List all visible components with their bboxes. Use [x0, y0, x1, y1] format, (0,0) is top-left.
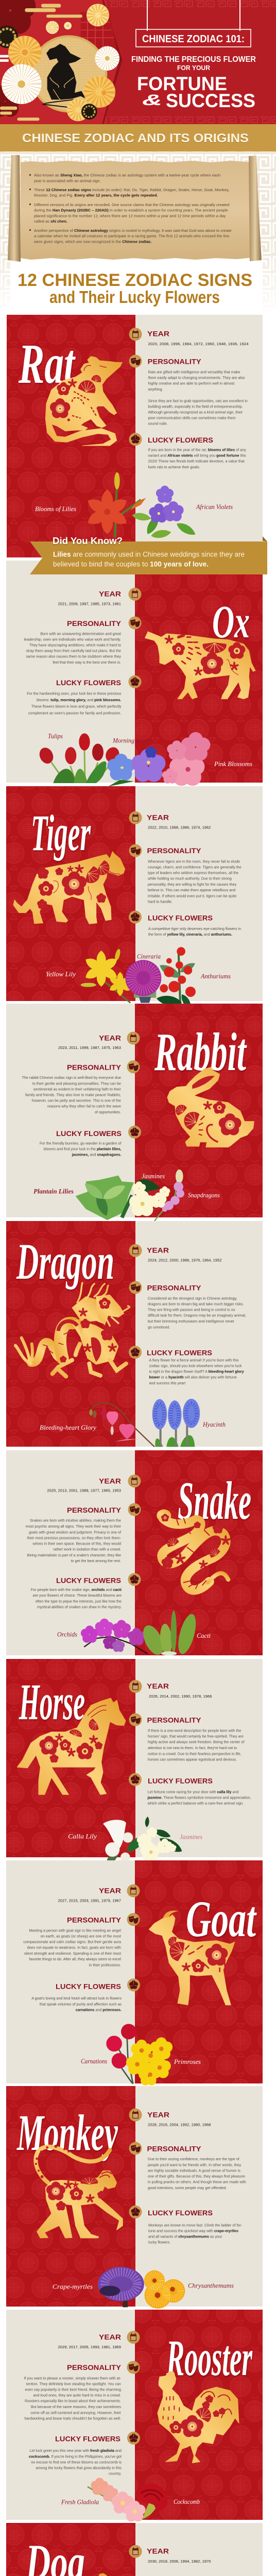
- title: [131, 33, 256, 111]
- flowers: orchids and cacti: [81, 1611, 199, 1658]
- years: 2022, 2010, 1998, 1986, 1974, 1962: [148, 825, 211, 830]
- personality text: type of leaders who seldom express themselves, all the: [148, 871, 238, 875]
- heading: lucky flowers: LUCKY FLOWERS: [147, 1348, 212, 1357]
- personality text: [148, 2157, 246, 2190]
- personality text: irritable. If others would even put it, tigers can be quite: [148, 893, 236, 898]
- name: Horse: Horse: [19, 1673, 85, 1731]
- heading: lucky flowers: LUCKY FLOWERS: [56, 679, 121, 687]
- origin text: Different versions of its origins are recorded. One source claims that the Chinese astrology was originally created: [34, 202, 229, 207]
- flowers: carnations and primroses: [106, 2024, 173, 2086]
- scroll with origin text: [8, 155, 262, 262]
- title: SUCCESS: [166, 90, 255, 111]
- icons: year, personality, flowers: [128, 1475, 141, 1586]
- panel: Rat: [7, 315, 263, 557]
- heading: year: YEAR: [147, 330, 169, 338]
- heading: personality: PERSONALITY: [67, 1916, 122, 1924]
- heading: personality: PERSONALITY: [147, 2144, 201, 2153]
- lucky flowers text: A goat's loving and kind heart will attract luck in flowers: [31, 1996, 122, 2001]
- panel: Horse: [6, 1659, 263, 1867]
- heading: personality: PERSONALITY: [67, 619, 122, 628]
- personality text: sound rude.: [148, 421, 167, 426]
- heading: lucky flowers: LUCKY FLOWERS: [148, 914, 213, 922]
- flower labels: Cacti: [197, 1632, 211, 1639]
- lucky flowers text: If you are born in the year of the rat, blooms of lilies of any: [148, 448, 246, 452]
- years: 2023, 2011, 1999, 1987, 1975, 1963: [58, 1045, 121, 1050]
- personality text: same reason also causes them to be stubborn where they: [26, 654, 121, 659]
- personality text: even say popularity is their best friend. Being the charming: [25, 2387, 121, 2392]
- flowers: fresh gladiola and cockscomb: [88, 2478, 167, 2521]
- personality text: hard to handle.: [148, 899, 173, 904]
- title: &: [142, 92, 162, 109]
- flowers: tulips, morning glory, pink blossoms: [37, 732, 210, 787]
- years: 2028, 2016, 2004, 1992, 1980, 1968: [148, 2122, 211, 2127]
- flower labels: Snapdragons: [188, 1191, 220, 1199]
- flower labels: [68, 1832, 202, 1840]
- personality text: poor communication skills can sometimes make them: [148, 416, 236, 420]
- flower labels: [33, 1172, 220, 1199]
- personality text: [148, 1296, 246, 1329]
- personality text: and loud ones, they are quite hard to miss in a crowd.: [33, 2393, 121, 2398]
- origin text: [33, 173, 232, 244]
- personality text: believe in. This can make them appear rebellious and: [148, 888, 235, 892]
- flower labels: [81, 2057, 201, 2065]
- heading: lucky flowers: LUCKY FLOWERS: [55, 2434, 120, 2443]
- origin text: Also known as Sheng Xiao, the Chinese zodiac is an astrology system with a twelve-year cycle where each: [34, 173, 220, 178]
- lucky flowers text: A fiery flower for a fierce animal! If you're born with this: [149, 1358, 239, 1362]
- flower labels: Blooms of Lilies: [35, 505, 76, 513]
- name: Rat: Rat: [18, 332, 76, 395]
- personality text: reasons why they often fail to catch the wave: [47, 1104, 121, 1109]
- flower labels: [46, 953, 231, 980]
- heading: year: YEAR: [99, 1033, 121, 1042]
- origin text: year is associated with an animal sign.: [34, 179, 101, 183]
- flowers: calla lily and jasmine: [103, 1817, 184, 1867]
- flower labels: Pink Blossoms: [214, 760, 252, 768]
- lucky flowers text: [148, 926, 241, 937]
- flower labels: Cineraria: [137, 953, 161, 960]
- lucky flowers text: For people born with the snake sign, orchids and cacti: [31, 1587, 122, 1592]
- personality text: They have skyscraping ambitions, which make it hard to: [29, 643, 121, 648]
- origin text: were given signs, which are now recognized in the Chinese zodiac.: [33, 239, 152, 244]
- personality text: hardworking and brave traits shouldn't be forgotten as well.: [24, 2416, 121, 2421]
- lucky flowers text: zodiac sign, should you look elsewhere when you're luck: [149, 1364, 242, 1368]
- personality text: [148, 1728, 244, 1761]
- main heading: [18, 270, 252, 307]
- heading: year: YEAR: [147, 1246, 169, 1255]
- name: Tiger: Tiger: [31, 804, 91, 861]
- personality text: good intentions, some people may get offended.: [148, 2185, 227, 2190]
- personality text: goals with great wisdom and judgment. Privacy is one of: [29, 1530, 121, 1534]
- panel: Dragon: [6, 1221, 263, 1447]
- title: FORTUNE: [137, 73, 227, 94]
- flower labels: [35, 503, 233, 513]
- lucky flowers text: Let fortune come racing for your door with calla lily and: [147, 1789, 239, 1794]
- lucky flowers text: and all variants of chrysanthemums as your: [148, 2234, 222, 2239]
- personality text: building wealth, especially in the field of entrepreneurship.: [148, 404, 243, 409]
- flower labels: Jasmines: [180, 1833, 202, 1840]
- personality text: come off as self-centered and annoying. However, their: [30, 2410, 122, 2415]
- personality text: difficult task for them. Dragons may be an imaginary animal,: [148, 1313, 246, 1318]
- lucky flowers text: no excuse to find one of these blooms as cockscomb is: [31, 2460, 122, 2464]
- personality text: favorite things to do. After all, they always seem to excel: [29, 1957, 121, 1961]
- animal: monkey: [35, 2145, 123, 2238]
- personality text: are highly sociable individuals. A good sense of humor is: [148, 2168, 240, 2173]
- years: 2025, 2013, 2001, 1989, 1977, 1965, 1953: [47, 1488, 121, 1493]
- lucky flowers text: Let luck greet you this new year with fresh gladiola and: [29, 2448, 122, 2453]
- personality text: Considered as the strongest sign in Chinese astrology,: [148, 1296, 237, 1300]
- personality text: their most precious possessions, so they often lock them-: [27, 1535, 122, 1540]
- lucky flowers text: lucky flowers.: [148, 2240, 170, 2245]
- flowers: crape-myrtles and chrysanthemums: [98, 2267, 185, 2309]
- icons: year, personality, flowers: [129, 328, 142, 446]
- personality text: go unnoticed.: [148, 1325, 170, 1329]
- icons: year, personality, flowers: [127, 2331, 140, 2445]
- heading: lucky flowers: LUCKY FLOWERS: [148, 1776, 213, 1785]
- animal: ox: [145, 632, 255, 699]
- personality text: people you'd want to be friends with. In other words, they: [148, 2162, 242, 2167]
- personality text: Being materialistic is part of a snake's character; they like: [27, 1553, 121, 1557]
- years: 2027, 2015, 2003, 1991, 1979, 1967: [58, 1899, 121, 1903]
- heading: personality: PERSONALITY: [147, 846, 201, 855]
- personality text: Due to their oozing confidence, monkeys are the type of: [148, 2157, 239, 2161]
- panel: Rabbit: [6, 1004, 263, 1221]
- personality text: Snakes are born with intuitive abilities, making them the: [30, 1518, 121, 1523]
- personality text: If there is a one-word description for people born with the: [148, 1728, 241, 1733]
- flower labels: [48, 732, 252, 768]
- lucky flowers text: which strike a perfect balance with a care-free animal sign.: [147, 1801, 244, 1806]
- personality text: rather work in isolation than with a crowd.: [53, 1547, 121, 1552]
- lucky flowers text: carnations and primroses.: [76, 2007, 122, 2012]
- heading: lucky flowers: LUCKY FLOWERS: [148, 2209, 213, 2217]
- flowers: lily and african violet: [85, 472, 197, 539]
- animal: dog: [31, 2573, 117, 2576]
- personality text: to get the best among the rest.: [71, 1558, 121, 1563]
- lucky flowers text: variant and African violets will bring you good fortune this: [148, 453, 246, 458]
- main heading: 12 CHINESE ZODIAC SIGNS: [18, 270, 252, 290]
- personality text: leadership, oxen are individuals who value work and family.: [24, 637, 121, 641]
- header banner: [0, 0, 276, 124]
- callout text: believed to bind the couples to 100 years of love.: [53, 560, 209, 568]
- panel: Rooster: [6, 2310, 263, 2521]
- heading: personality: PERSONALITY: [147, 1283, 201, 1292]
- title: FINDING THE PRECIOUS FLOWER: [131, 55, 256, 64]
- personality text: to their gentle and pleasing personalities. They can be: [32, 1081, 121, 1086]
- origin text: Another perspective of Chinese astrology origins is rooted in mythology. It was said that God was about to create: [34, 228, 232, 233]
- icons: year, personality, flowers: [127, 1031, 141, 1139]
- years: 2020, 2008, 1996, 1984, 1972, 1960, 1948, 1936, 1924: [148, 342, 248, 346]
- origin text: These 12 Chinese zodiac signs include (in order): Rat, Ox, Tiger, Rabbit, Dragon, Snake, Horse, Goat, Monkey,: [34, 188, 229, 192]
- lucky flowers text: mystical abilities of snakes can draw in the mystery.: [37, 1604, 122, 1609]
- personality text: They are firing with passion and being in control is no: [148, 1308, 235, 1312]
- heading: lucky flowers: LUCKY FLOWERS: [148, 436, 213, 444]
- personality text: on earth, as goats (or sheep) are one of the most: [41, 1934, 121, 1939]
- lucky flowers text: blooms: tulip, morning glory, and pink blossoms.: [37, 698, 122, 702]
- name: Ox: Ox: [212, 597, 250, 648]
- heading: personality: PERSONALITY: [147, 1716, 201, 1724]
- origin text: placed significance to the number 12, where there are 12 moons within a year and 12 time periods within a day: [34, 213, 226, 218]
- icons: year, personality, flowers: [129, 2545, 142, 2576]
- callout heading: Did You Know?: [53, 536, 123, 546]
- panel: Goat: [6, 1860, 263, 2086]
- lucky flowers text: [31, 1587, 122, 1609]
- personality text: dragons are born to dream big and take much bigger risks.: [148, 1302, 244, 1307]
- flower labels: Cockscomb: [174, 2498, 200, 2505]
- header frame with hanging lines: [136, 0, 251, 47]
- personality text: Born with an unwavering determination and great: [40, 631, 121, 636]
- personality text: horses' sign, that would certainly be free-spirited. They are: [148, 1734, 244, 1739]
- lucky flowers text: [148, 448, 246, 469]
- years: 2029, 2017, 2005, 1993, 1981, 1969: [58, 2345, 121, 2349]
- years: 2026, 2014, 2002, 1990, 1978, 1966: [149, 1694, 212, 1699]
- section heading band: origins: [0, 124, 276, 151]
- years: 2030, 2018, 2006, 1994, 1982, 1970: [148, 2559, 211, 2564]
- icons: year, personality, flowers: [129, 588, 141, 688]
- flower labels: Tulips: [48, 732, 63, 740]
- lucky flowers text: [29, 2448, 122, 2476]
- animal: snake: [157, 1510, 231, 1590]
- flower labels: Jasmines: [142, 1172, 165, 1180]
- personality text: personality, they are willing to fight for the causes they: [148, 882, 236, 887]
- lucky flowers text: blooms and find your luck in the plantain lilies,: [44, 1146, 122, 1151]
- personality text: in pulling pranks on others. And though these are made with: [148, 2180, 246, 2184]
- panel: Dog: [6, 2523, 263, 2576]
- personality text: sentimental as evident in their unfaltering faith to their: [33, 1087, 122, 1091]
- lucky flowers text: These flowers bloom in love and grace, which perfectly: [31, 704, 122, 709]
- heading: year: YEAR: [147, 2110, 169, 2119]
- origin text: Rooster, Dog, and Pig. Every after 12 years, the cycle gets repeated.: [34, 193, 158, 198]
- heading: lucky flowers: LUCKY FLOWERS: [56, 1129, 122, 1138]
- personality text: [147, 859, 242, 904]
- personality text: highly active and always seek freedom. Being the center of: [148, 1740, 244, 1744]
- personality text: most psychic among all signs. They work their way to their: [26, 1524, 122, 1529]
- callout: did you know ribbon: [30, 536, 267, 574]
- heading: year: YEAR: [99, 1886, 121, 1894]
- animal: tiger: [13, 852, 125, 924]
- flower labels: Primroses: [174, 2058, 201, 2065]
- origin text: a calendar when he invited all creatures to participate in a racing game. The first 12 animals who crossed the line: [34, 234, 229, 239]
- personality text: Since they are fast to grab opportunities, rats are excellent in: [148, 398, 248, 403]
- title: FOR YOUR: [177, 64, 210, 72]
- panel: Tiger: [6, 786, 263, 1011]
- years: 2024, 2012, 2000, 1988, 1976, 1964, 1952: [148, 1258, 222, 1263]
- lucky flowers text: fuels rats to achieve their goals.: [148, 465, 200, 469]
- main heading: and Their Lucky Flowers: [49, 287, 220, 307]
- origin text: during the Han Dynasty (202BC – 220AD) in order to establish a system for counting years. The ancient people: [34, 208, 228, 213]
- flower labels: Chrysanthemums: [188, 2282, 234, 2290]
- heading: personality: PERSONALITY: [67, 1506, 122, 1514]
- flower labels: Morning Glory: [112, 737, 150, 744]
- personality text: feel that their way is the best one there is.: [53, 660, 121, 665]
- title: CHINESE ZODIAC 101:: [142, 33, 245, 45]
- icons: year, personality, flowers: [129, 1680, 142, 1786]
- animal: rat: [45, 357, 122, 446]
- personality text: But because of the same reasons, they can sometimes: [31, 2404, 121, 2409]
- origin text: called as shi chen.: [34, 219, 67, 224]
- panel: Ox: [6, 557, 263, 787]
- callout text: Lilies are commonly used in Chinese weddings since they are: [53, 551, 245, 558]
- personality text: in their professions.: [89, 1962, 121, 1967]
- personality text: selves in their own space. Because of this, they would: [32, 1541, 121, 1546]
- personality text: [22, 1075, 122, 1114]
- animal: rabbit: [167, 1067, 254, 1147]
- lucky flowers text: bower or a hyacinth will also deliver you with fortune: [149, 1375, 237, 1380]
- flower labels: Anthuriums: [200, 972, 231, 980]
- personality text: highly creative and are able to perform well in almost: [148, 381, 234, 386]
- personality text: [26, 1518, 122, 1563]
- lucky flowers text: are your flowers of choice. These beautiful blooms are: [33, 1593, 122, 1598]
- flower labels: [57, 1631, 211, 1639]
- name: Monkey: Monkey: [16, 2104, 118, 2161]
- lucky flowers text: and success this year!: [149, 1381, 186, 1385]
- personality text: notice in a crowd. Due to their fearless perspective in life,: [148, 1751, 242, 1756]
- animal: dragon: [15, 1283, 129, 1377]
- flower labels: Yellow Lily: [46, 970, 76, 978]
- flower labels: [40, 1420, 226, 1431]
- personality text: [23, 1928, 121, 1967]
- personality text: of opportunities.: [95, 1110, 121, 1114]
- personality text: them easily adapt to changing environments. They are also: [148, 376, 245, 380]
- icons: year, personality, flowers: [129, 1244, 142, 1359]
- personality text: family and friends. They also love to make peace! Rabbits,: [25, 1092, 121, 1097]
- heading: year: YEAR: [147, 2547, 169, 2555]
- personality text: [148, 369, 248, 426]
- lucky flowers text: often the type to pique the interests, just like how the: [36, 1599, 122, 1603]
- panel: Snake: [6, 1450, 263, 1658]
- flower labels: African Violets: [196, 503, 233, 511]
- lucky flowers text: country.: [109, 2471, 122, 2476]
- heading: personality: PERSONALITY: [67, 1063, 122, 1072]
- animal: horse: [17, 1698, 126, 1794]
- heading: year: YEAR: [99, 1477, 121, 1485]
- flower labels: Plantain Lilies: [33, 1188, 74, 1195]
- lucky flowers text: among the lucky flowers that grow abundantly in this: [36, 2466, 122, 2470]
- flower labels: [61, 2498, 200, 2506]
- animal: goat: [149, 1910, 235, 2005]
- lucky flowers text: A competitive tiger only deserves eye-catching flowers in: [148, 926, 241, 931]
- personality text: Rats are gifted with intelligence and versatility that make: [148, 369, 240, 374]
- lucky flowers text: For the friendly bunnies, go wander in a garden of: [40, 1141, 122, 1145]
- personality text: Meeting a person with goat sign is like meeting an angel: [29, 1928, 121, 1933]
- heading: year: YEAR: [147, 1682, 169, 1690]
- heading: year: YEAR: [99, 590, 121, 598]
- flower labels: Crape-myrtles: [53, 2283, 93, 2291]
- lucky flowers text: Monkeys are known to move fast. Climb the ladder of for-: [148, 2223, 243, 2227]
- origin bullets: [29, 174, 31, 231]
- flower labels: Calla Lily: [68, 1832, 97, 1840]
- lucky flowers text: jasmine. These flowers symbolize innocence and appreciation,: [147, 1795, 251, 1800]
- name: Dragon: Dragon: [16, 1233, 114, 1290]
- lucky flowers text: [27, 691, 122, 715]
- personality text: silent strength and resilience. Spending is one of their most: [24, 1951, 121, 1956]
- flower labels: Carnations: [81, 2057, 107, 2065]
- key pattern background: [0, 151, 276, 315]
- flowers: plantain lilies, jasmines, snapdragons: [76, 1170, 184, 1221]
- lucky flowers text: the form of yellow lily, cineraria, and anthuriums.: [148, 932, 232, 937]
- personality text: stray them away from their carefully laid out plans. But the: [26, 649, 121, 653]
- lucky flowers text: that speak volumes of purity and affection such as: [40, 2002, 122, 2006]
- personality text: anything.: [148, 387, 163, 392]
- lucky flowers text: cockscomb. If you're living in the Philippines, you've got: [29, 2454, 122, 2459]
- flower labels: Fresh Gladiola: [61, 2498, 99, 2506]
- personality text: but their brimming enthusiasm and intelligence never: [148, 1319, 235, 1324]
- heading: lucky flowers: LUCKY FLOWERS: [56, 1577, 121, 1585]
- flower labels: Hyacinth: [202, 1420, 226, 1428]
- heading: lucky flowers: LUCKY FLOWERS: [56, 1982, 121, 1991]
- section heading band: origins: CHINESE ZODIAC AND ITS ORIGINS: [22, 131, 249, 145]
- lucky flowers text: [148, 2223, 243, 2245]
- personality text: compassionate and calm zodiac signs. But their gentle aura: [23, 1940, 121, 1944]
- years: 2021, 2009, 1997, 1985, 1973, 1961: [58, 602, 121, 606]
- icons: year, personality, flowers: [127, 1885, 140, 1991]
- lucky flowers text: complement an oxen's passion for family and profession.: [28, 710, 122, 715]
- icons: year, personality, flowers: [129, 811, 142, 923]
- lucky flowers text: [40, 1141, 122, 1157]
- flower labels: Orchids: [57, 1631, 77, 1638]
- animal: rooster: [158, 2371, 239, 2463]
- personality text: horses can sometimes appear egotistical and devious.: [148, 1757, 237, 1761]
- flower labels: Bleeding-heart Glory: [40, 1423, 96, 1431]
- flowers: yellow lily, cineraria, anthuriums: [81, 947, 197, 1011]
- personality text: Whenever tigers are in the room, they never fail to elude: [148, 859, 240, 863]
- personality text: however, can be petty and secretive. This is one of the: [32, 1098, 121, 1103]
- header illustration: rat with paper flowers: [0, 0, 123, 124]
- heading: personality: PERSONALITY: [148, 358, 201, 366]
- lucky flowers text: 2020! These two florals both indicate devotion, a value that: [148, 459, 245, 464]
- heading: year: YEAR: [147, 814, 169, 822]
- flower labels: [53, 2282, 234, 2291]
- panel: Monkey: [6, 2086, 263, 2309]
- lucky flowers text: [149, 1358, 244, 1385]
- flowers: bleeding-heart glory and hyacinth: [89, 1399, 200, 1447]
- lucky flowers text: For the hardworking oxen, your luck lies in these precious: [27, 691, 122, 696]
- callout text: [53, 551, 245, 568]
- heading: year: YEAR: [99, 2333, 121, 2341]
- personality text: Although generally recognized as a kind animal sign, their: [148, 410, 243, 415]
- personality text: [24, 631, 121, 665]
- personality text: tention. They definitely love stealing the spotlight. You can: [26, 2382, 121, 2386]
- personality text: If you want to please a rooster, simply shower them with at-: [24, 2376, 122, 2380]
- personality text: The rabbit Chinese zodiac sign is well-liked by everyone due: [22, 1075, 121, 1080]
- personality text: Roosters especially like to boast about their achievements.: [25, 2399, 121, 2403]
- lucky flowers text: jasmines, and snapdragons.: [72, 1153, 122, 1157]
- personality text: attention is not new to them. In fact, they're hard not to: [148, 1745, 237, 1750]
- personality text: one of their gifts. Because of this, they always find pleasure: [148, 2174, 245, 2179]
- lucky flowers text: [147, 1789, 251, 1806]
- lucky flowers text: [31, 1996, 122, 2012]
- lucky flowers text: is right in the dragon flower itself? A bleeding-heart glory: [149, 1369, 244, 1374]
- icons: year, personality, flowers: [129, 2108, 142, 2218]
- personality text: while holding so much authority. Due to their strong: [147, 876, 232, 881]
- personality text: does not equate to weakness. In fact, goats are born with: [27, 1945, 121, 1950]
- lucky flowers text: tune and success the quickest way with crape-myrtles: [148, 2228, 238, 2233]
- personality text: [24, 2376, 122, 2421]
- personality text: courage, charm, and confidence. Tigers are generally the: [148, 865, 242, 870]
- heading: personality: PERSONALITY: [67, 2363, 122, 2371]
